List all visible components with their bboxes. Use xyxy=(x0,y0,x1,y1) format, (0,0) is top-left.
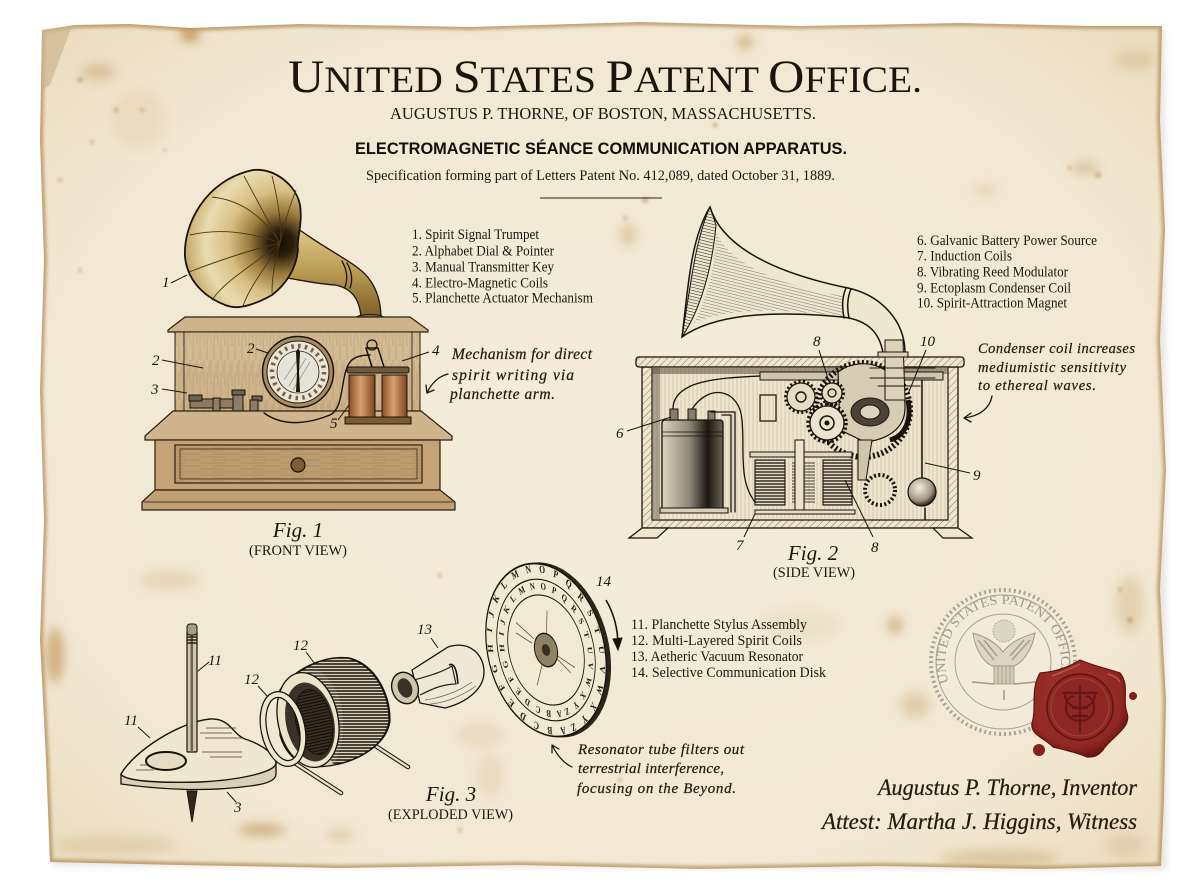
parts list 6-10: 6. Galvanic Battery Power Source xyxy=(917,233,1097,249)
arrow to cabinet xyxy=(426,374,448,393)
parts list 11-14: 11. Planchette Stylus Assembly xyxy=(631,617,808,633)
embossed patent office seal: UNITED STATES PATENT OFFICE xyxy=(936,596,1070,684)
callout numbers Fig 2: 7 xyxy=(736,538,745,554)
parts list 1-5: 2. Alphabet Dial & Pointer xyxy=(412,244,554,260)
communication disk: ABCDEFGHIJKLMNOPQRSTUVWXYZ xyxy=(487,565,605,734)
embossed patent office seal xyxy=(929,588,1077,736)
handwritten note: condenser coil: mediumistic sensitivity xyxy=(978,360,1127,376)
horn bell xyxy=(185,170,301,307)
drawer body xyxy=(155,440,440,490)
telegraph key xyxy=(182,390,267,425)
shelf top xyxy=(145,411,452,440)
callout numbers Fig 1: 2 xyxy=(247,341,255,357)
callout numbers Fig 3: 11 xyxy=(208,653,222,669)
electro-magnetic coils xyxy=(345,340,411,424)
figure 3 caption xyxy=(388,782,513,823)
callout numbers Fig 3: 12 xyxy=(244,672,260,688)
cabinet plinth xyxy=(142,490,455,510)
horn neck xyxy=(287,228,381,318)
pendulum condenser xyxy=(908,380,936,520)
cabinet back panel xyxy=(175,332,420,414)
handwritten note: condenser coil: Condenser coil increases xyxy=(978,341,1135,357)
inventor signature: Augustus P. Thorne, Inventor xyxy=(876,775,1138,800)
callout numbers Fig 3: 14 xyxy=(596,574,612,590)
parts list 1-5: 5. Planchette Actuator Mechanism xyxy=(412,291,594,307)
handwritten note: resonator xyxy=(577,742,745,797)
figure 3 caption: (EXPLODED VIEW) xyxy=(388,807,513,823)
red wax seal xyxy=(1032,660,1137,757)
parts list 6-10: 7. Induction Coils xyxy=(917,249,1012,265)
parts list 1-5: 3. Manual Transmitter Key xyxy=(412,260,555,276)
parts list 6-10 xyxy=(917,233,1097,312)
callout numbers Fig 1: 5 xyxy=(330,416,338,432)
inventor line: AUGUSTUS P. THORNE, OF BOSTON, MASSACHUSETTS. xyxy=(390,104,816,123)
callout numbers Fig 1: 3 xyxy=(150,382,158,398)
callout numbers Fig 3: 11 xyxy=(124,713,138,729)
callout numbers Fig 3: 12 xyxy=(293,638,308,654)
communication disk: ABCDEFGHIJKLMNOPQRSTUVWXYZ xyxy=(499,582,593,718)
figure 1 caption: Fig. 1 xyxy=(272,518,323,542)
callout numbers Fig 1 xyxy=(150,275,440,432)
callout numbers Fig 2: 10 xyxy=(920,334,936,350)
parts list 6-10: 9. Ectoplasm Condenser Coil xyxy=(917,280,1071,296)
callout numbers Fig 1: 4 xyxy=(432,343,440,359)
Figure 3: exploded view xyxy=(120,562,623,822)
parts list 1-5: 4. Electro-Magnetic Coils xyxy=(412,275,548,291)
battery xyxy=(660,376,760,513)
title: UNITED STATES PATENT OFFICE. xyxy=(288,51,922,103)
parts list 11-14: 13. Aetheric Vacuum Resonator xyxy=(631,649,803,665)
handwritten note: planchette arm xyxy=(449,346,593,403)
aged corner xyxy=(40,26,72,90)
callout numbers Fig 3: 3 xyxy=(233,800,242,816)
callout numbers Fig 2 xyxy=(616,334,981,556)
callout numbers Fig 2: 8 xyxy=(871,540,879,556)
handwritten note: condenser coil xyxy=(978,341,1135,394)
parts list 1-5 xyxy=(412,227,594,307)
parts list 6-10: 8. Vibrating Reed Modulator xyxy=(917,265,1068,281)
handwritten note: planchette arm: spirit writing via xyxy=(452,367,574,384)
wire xyxy=(264,355,370,423)
induction coils xyxy=(750,440,855,514)
parts list 11-14 xyxy=(631,617,827,681)
rotation arrow xyxy=(606,600,618,646)
stylus pencil xyxy=(187,624,197,752)
specks xyxy=(58,77,1133,832)
figure 3 caption: Fig. 3 xyxy=(425,782,476,806)
Figure 1: front view phonograph cabinet xyxy=(142,170,455,510)
witness signature: Attest: Martha J. Higgins, Witness xyxy=(820,809,1137,834)
apparatus heading: ELECTROMAGNETIC SÉANCE COMMUNICATION APPARATUS. xyxy=(355,139,847,158)
callout numbers Fig 1: 2 xyxy=(152,353,160,369)
callout numbers Fig 1: 1 xyxy=(162,275,170,291)
separate coil ring xyxy=(257,691,309,767)
figure 1 caption: (FRONT VIEW) xyxy=(249,543,347,559)
arrow to disk xyxy=(552,745,572,767)
handwritten note: planchette arm: Mechanism for direct xyxy=(451,346,593,363)
gear train xyxy=(760,363,943,505)
handwritten note: condenser coil: to ethereal waves. xyxy=(978,378,1096,394)
vacuum resonator bulb xyxy=(387,645,484,708)
figure 2 caption: Fig. 2 xyxy=(787,541,839,565)
handwritten note: planchette arm: planchette arm. xyxy=(449,386,555,403)
figure 2 caption: (SIDE VIEW) xyxy=(773,565,855,581)
figure 1 caption xyxy=(249,518,347,559)
figure 2 caption xyxy=(773,541,855,581)
parts list 6-10: 10. Spirit-Attraction Magnet xyxy=(917,296,1067,312)
drawer panel xyxy=(175,445,422,483)
callout numbers Fig 2: 8 xyxy=(813,334,821,350)
callout numbers Fig 2: 6 xyxy=(616,426,624,442)
coil rods xyxy=(293,745,408,793)
planchette board xyxy=(121,719,276,822)
specification line: Specification forming part of Letters Patent No. 412,089, dated October 31, 1889. xyxy=(366,168,835,184)
multi-layered spirit coil xyxy=(269,658,390,773)
cutaway case walls xyxy=(629,357,972,538)
parts list 11-14: 14. Selective Communication Disk xyxy=(631,665,827,681)
handwritten note: resonator: Resonator tube filters out xyxy=(577,742,745,758)
cabinet top xyxy=(168,317,428,332)
arrow to case xyxy=(964,396,992,422)
dial clock xyxy=(262,336,334,408)
horn base ring xyxy=(356,314,384,322)
Figure 2: side cutaway xyxy=(629,207,972,538)
handwritten note: resonator: terrestrial interference, xyxy=(578,761,724,777)
callout numbers Fig 3 xyxy=(124,574,612,816)
callout numbers Fig 3: 13 xyxy=(417,622,432,638)
drawer knob xyxy=(291,458,305,472)
side horn xyxy=(682,207,935,400)
handwritten note: resonator: focusing on the Beyond. xyxy=(577,781,736,797)
callout numbers Fig 2: 9 xyxy=(973,468,981,484)
parts list 11-14: 12. Multi-Layered Spirit Coils xyxy=(631,633,802,649)
parts list 1-5: 1. Spirit Signal Trumpet xyxy=(412,227,539,243)
eagle emblem xyxy=(972,620,1036,700)
